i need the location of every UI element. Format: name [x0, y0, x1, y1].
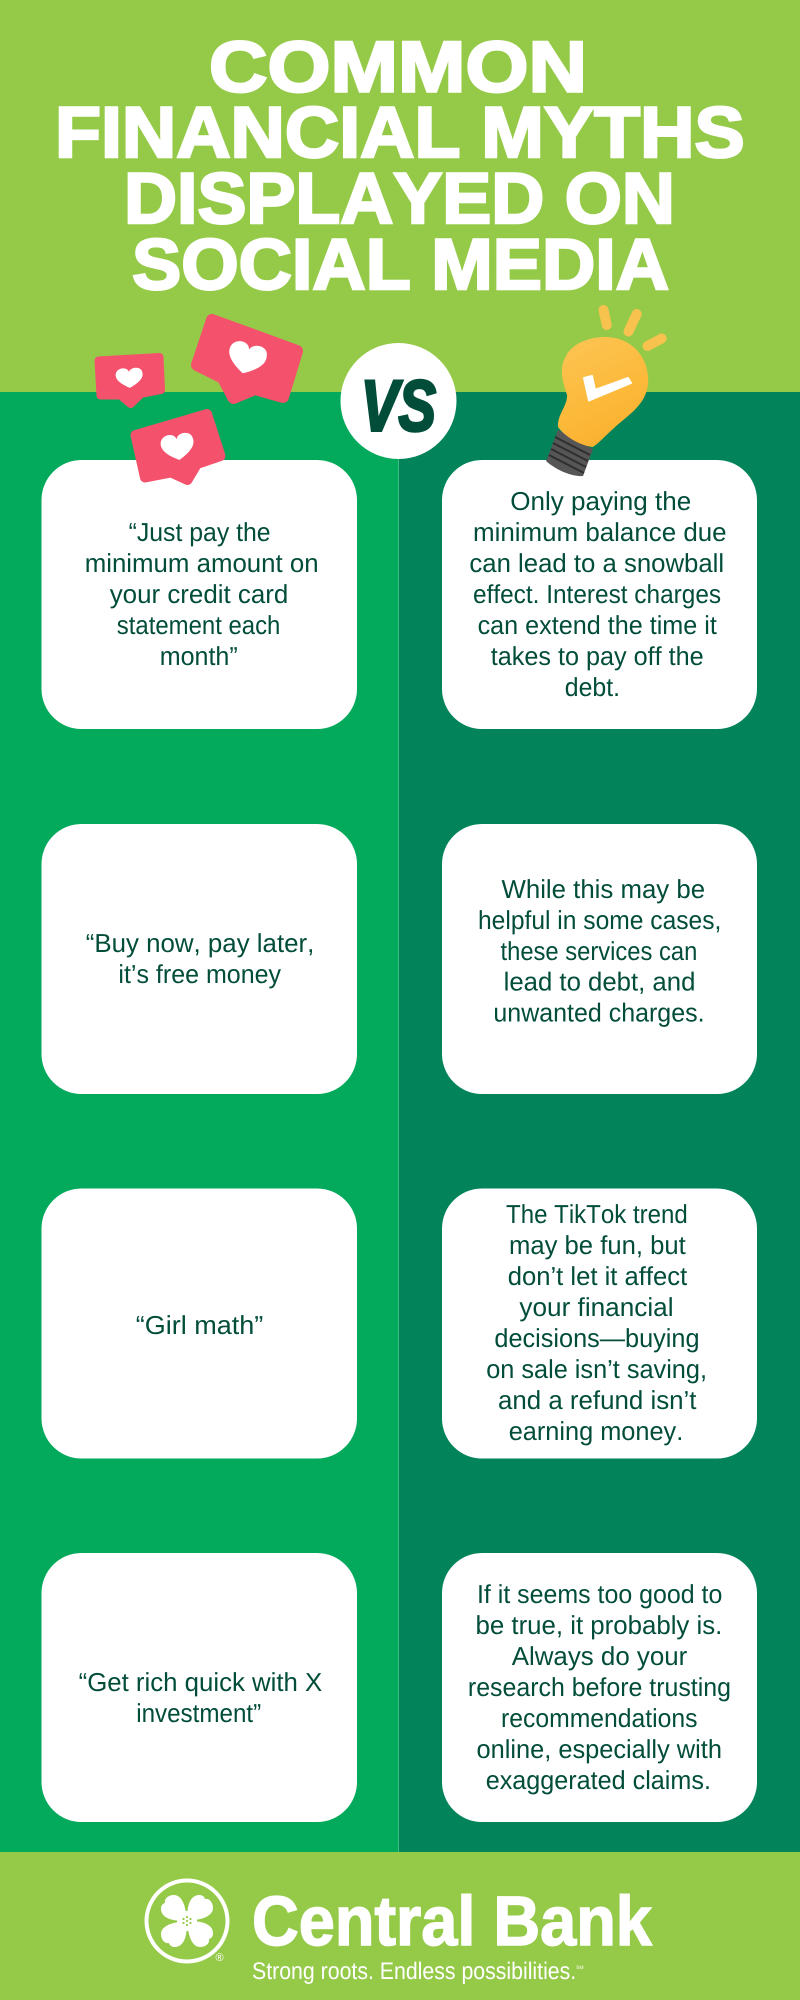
panel: myth 1 card: “Just pay the — [129, 517, 271, 547]
panel: fact 2 card: While this may be — [502, 874, 705, 904]
icon: bulb rays — [604, 310, 662, 346]
panel: fact 4 card: be true, it probably is. — [476, 1610, 722, 1640]
panel: fact 2 card: unwanted charges. — [493, 998, 705, 1028]
icon: VS badge: VS — [361, 366, 436, 446]
panel: myth 1 card: statement each — [117, 610, 280, 640]
right column background: facts — [399, 392, 800, 1852]
panel: fact 3 card: earning money. — [509, 1416, 683, 1446]
icon: lower heart bubble — [136, 414, 220, 480]
panel: fact 2 card: helpful in some cases, — [478, 905, 721, 935]
panel: fact 1 card: minimum balance due — [473, 517, 727, 547]
icon: bulb glass — [558, 337, 648, 447]
icon: bulb screw base — [546, 430, 593, 476]
panel: myth 2 card: “Buy now, pay later, — [86, 928, 314, 958]
title: SOCIAL MEDIA — [132, 225, 669, 305]
panel: fact 3 card — [442, 1188, 757, 1458]
tagline: Strong roots. Endless possibilities. — [252, 1958, 576, 1985]
icon: large heart bubble — [197, 320, 297, 398]
tagline: SM — [576, 1965, 584, 1971]
panel: fact 4 card: Always do your — [512, 1641, 688, 1671]
icon: light bulb with check mark — [546, 310, 662, 476]
icon: dogwood flower emblem: ® — [216, 1952, 224, 1964]
panel: fact 1 card: can extend the time it — [478, 610, 718, 640]
left column background: myths — [0, 392, 399, 1852]
panel: fact 1 card: takes to pay off the — [491, 641, 704, 671]
icon: white check mark — [584, 376, 631, 400]
panel: fact 3 card: don’t let it affect — [508, 1261, 688, 1291]
title — [55, 28, 745, 305]
panel: fact 4 card: research before trusting — [468, 1672, 731, 1702]
panel: fact 3 card: your financial — [519, 1292, 674, 1322]
footer band — [0, 1852, 800, 2000]
panel: fact 3 card: on sale isn’t saving, — [486, 1354, 707, 1384]
panel: fact 4 card — [442, 1553, 757, 1822]
icon: VS badge — [340, 343, 456, 459]
panel: fact 3 card: and a refund isn’t — [498, 1385, 697, 1415]
panel: myth 1 card: your credit card — [110, 579, 288, 609]
panel: fact 2 card: lead to debt, and — [504, 966, 695, 996]
panel: myth 1 card — [42, 460, 357, 729]
panel: fact 1 card: debt. — [565, 672, 620, 702]
panel: fact 2 card: these services can — [500, 936, 697, 966]
panel: fact 1 card: Only paying the — [510, 486, 691, 516]
panel: fact 3 card: may be fun, but — [509, 1230, 686, 1260]
panel: fact 4 card: online, especially with — [476, 1734, 722, 1764]
top header band — [0, 0, 800, 392]
panel: fact 3 card: The TikTok trend — [506, 1199, 688, 1229]
panel: myth 4 card: investment” — [136, 1698, 261, 1728]
panel: fact 1 card — [442, 460, 757, 729]
panel: fact 4 card: recommendations — [501, 1703, 698, 1733]
icon: dogwood flower emblem — [146, 1880, 228, 1964]
panel: fact 4 card: If it seems too good to — [477, 1579, 722, 1609]
panel: myth 3 card — [42, 1188, 357, 1458]
panel: myth 4 card: “Get rich quick with X — [79, 1667, 322, 1697]
panel: myth 2 card: it’s free money — [118, 959, 281, 989]
title: FINANCIAL MYTHS — [55, 93, 745, 173]
panel: fact 2 card — [442, 824, 757, 1094]
panel: myth 2 card — [42, 824, 357, 1094]
panel: myth 4 card — [42, 1553, 357, 1822]
panel: myth 3 card: “Girl math” — [136, 1310, 263, 1340]
title: COMMON — [209, 28, 587, 108]
icon: social media like bubbles — [98, 320, 297, 480]
logo: Central Bank — [146, 1880, 652, 1985]
panel: fact 4 card: exaggerated claims. — [486, 1765, 711, 1795]
panel: fact 3 card: decisions—buying — [494, 1323, 700, 1353]
title: DISPLAYED ON — [124, 159, 675, 239]
panel: fact 1 card: can lead to a snowball — [469, 548, 724, 578]
icon: small heart bubble — [98, 357, 161, 404]
panel: myth 1 card: minimum amount on — [85, 548, 319, 578]
panel: myth 1 card: month” — [160, 641, 238, 671]
panel: fact 1 card: effect. Interest charges — [473, 579, 721, 609]
wordmark: Central Bank — [252, 1882, 652, 1960]
